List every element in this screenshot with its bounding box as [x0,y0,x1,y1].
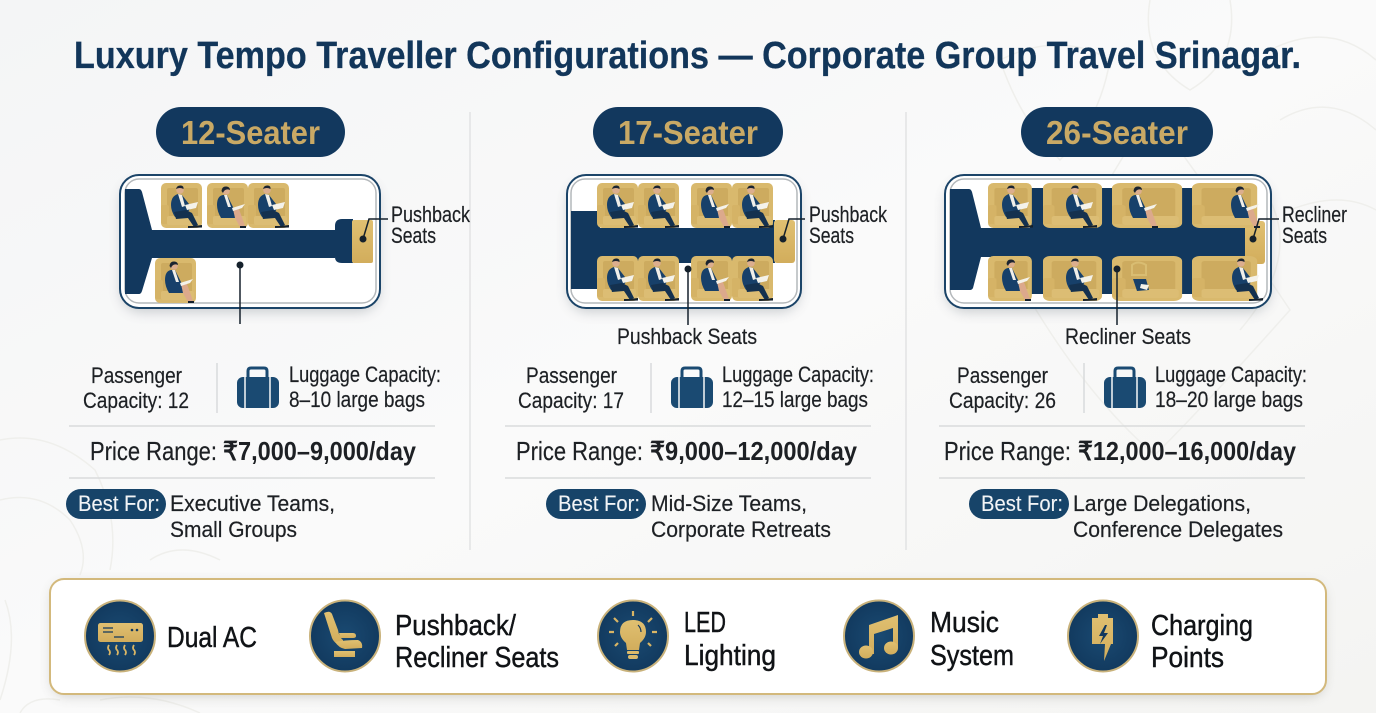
price range: Price Range: [90,436,217,466]
luggage capacity [1155,362,1307,412]
best for: Best For: [78,491,160,516]
passenger capacity: Passenger [526,363,617,388]
amenity: music system [844,600,1014,672]
callout: pushback seats right: Pushback [809,202,888,227]
amenity: LED lighting: LED [684,607,726,639]
seating layout: 26-seater [945,175,1347,349]
amenity: pushback/recliner seats [310,600,559,674]
heading pill: 12-Seater: 12-Seater [181,114,320,151]
amenity: dual AC [85,600,257,672]
icon: battery with bolt [1068,600,1138,672]
price range [516,436,857,466]
price range: Price Range: [516,436,643,466]
price range [90,436,416,466]
icon: luggage [671,368,713,410]
passenger capacity: Capacity: 17 [518,388,624,413]
price range: ₹9,000–12,000/day [650,436,857,466]
callout: pushback seats [391,202,471,248]
amenity: LED lighting: Lighting [684,640,776,672]
heading pill: 12-Seater [156,107,345,157]
panel: 26-seater [939,107,1347,542]
best for: Small Groups [170,517,297,542]
callout: pushback seats: Pushback [391,202,471,227]
callout: recliner seats right [1282,202,1347,248]
passenger capacity [949,363,1056,413]
amenity: charging points: Points [1151,642,1224,674]
icon: luggage [1104,368,1146,410]
callout: recliner seats right: Recliner [1282,202,1347,227]
luggage capacity: Luggage Capacity: [1155,362,1307,387]
icon: light bulb [598,600,668,672]
seating layout: 17-seater [567,175,888,349]
best for: Executive Teams, [170,491,335,516]
callout: pushback seats right: Seats [809,223,854,248]
panel: 17-seater [505,107,888,542]
passenger capacity: Capacity: 26 [949,388,1056,413]
price range: ₹12,000–16,000/day [1078,436,1296,466]
passenger capacity: Passenger [957,363,1048,388]
luggage capacity: 18–20 large bags [1155,387,1303,412]
icon: music note [844,600,914,672]
best for: Conference Delegates [1073,517,1283,542]
price range: Price Range: [944,436,1071,466]
luggage capacity: 8–10 large bags [289,387,425,412]
callout: pushback seats bottom: Pushback Seats [617,324,757,349]
callout: pushback seats right [809,202,888,248]
callout: recliner seats right: Seats [1282,223,1327,248]
top-down seated figure [1132,262,1149,291]
best for: Corporate Retreats [651,517,831,542]
amenity: music system: Music [930,607,999,639]
luggage capacity: 12–15 large bags [722,387,868,412]
amenity: charging points: Charging [1151,610,1253,642]
panel: 12-seater [66,107,471,542]
best for [969,489,1283,542]
callout: pushback seats: Seats [391,223,436,248]
panel: amenities [50,579,1326,696]
amenity: pushback/recliner seats: Recliner Seats [395,642,559,674]
column dividers [470,112,906,550]
passenger capacity: Passenger [91,363,182,388]
amenity: pushback/recliner seats: Pushback/ [395,610,517,642]
icon: seat [310,600,380,672]
passenger capacity [83,363,189,413]
heading pill: 17-Seater [593,107,783,157]
luggage capacity: Luggage Capacity: [289,362,441,387]
best for [66,489,335,542]
amenity: LED lighting [598,600,776,672]
luggage capacity: Luggage Capacity: [722,362,874,387]
icon: luggage [237,368,279,410]
decorative mandala: bottom left [0,438,220,713]
best for: Large Delegations, [1073,491,1251,516]
seating layout: 12-seater [120,175,471,324]
luggage capacity [722,362,874,412]
best for: Mid-Size Teams, [651,491,807,516]
amenity: dual AC: Dual AC [167,622,257,654]
callout: recliner seats bottom: Recliner Seats [1065,324,1191,349]
best for: Best For: [558,491,640,516]
best for: Best For: [981,491,1063,516]
heading pill: 17-Seater: 17-Seater [618,114,758,151]
passenger capacity: Capacity: 12 [83,388,189,413]
best for [546,489,831,542]
heading pill: 26-Seater [1021,107,1213,157]
price range [944,436,1296,466]
decorative mandala: top right [1000,0,1376,455]
heading pill: 26-Seater: 26-Seater [1046,114,1188,151]
luggage capacity [289,362,441,412]
icon: air conditioner [85,600,155,672]
price range: ₹7,000–9,000/day [223,436,416,466]
passenger capacity [518,363,624,413]
amenity: music system: System [930,640,1014,672]
amenity: charging points [1068,600,1253,674]
